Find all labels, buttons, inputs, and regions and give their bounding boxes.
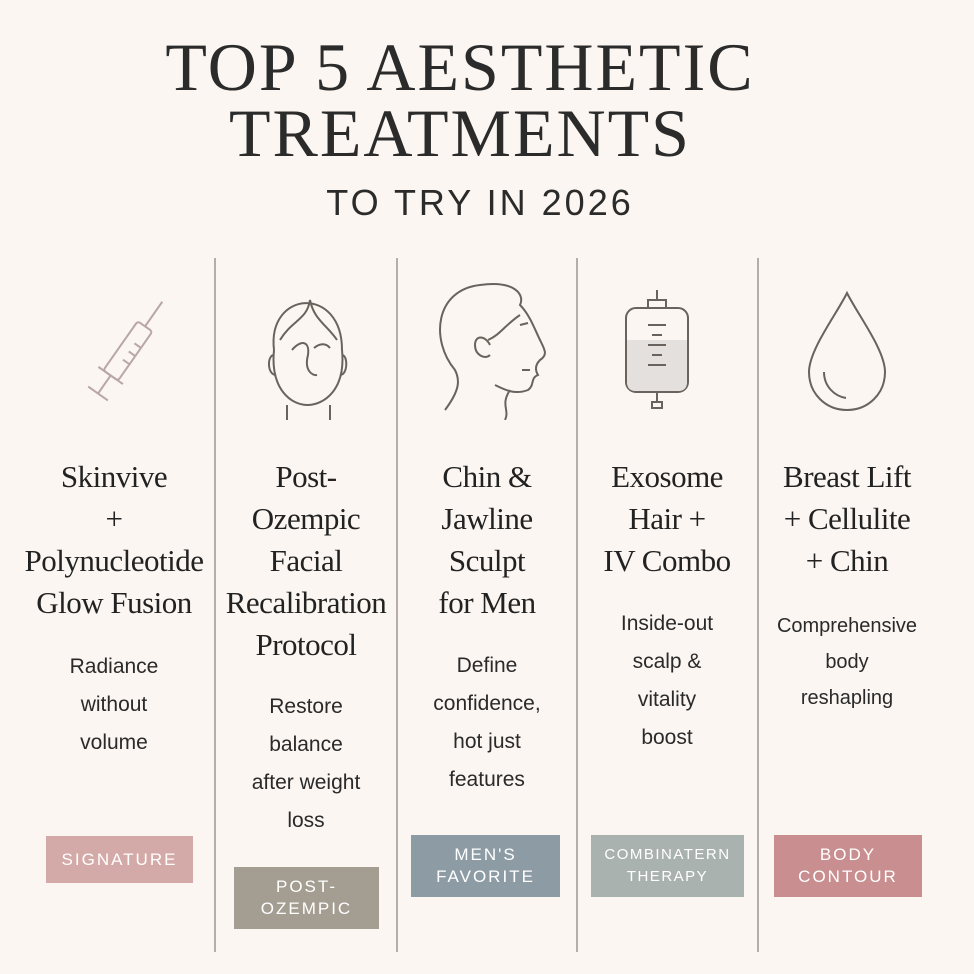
column 5: Breast Lift <box>783 459 911 494</box>
column 1: Skinvive <box>61 459 167 494</box>
column 4: Inside-out <box>621 612 713 635</box>
column 1: + <box>106 501 122 536</box>
column 2: Facial <box>270 543 342 578</box>
badge: post-ozempic: POST- <box>276 877 337 896</box>
badge: body contour <box>774 835 922 897</box>
column 2: Post- <box>275 459 337 494</box>
badge: body contour: BODY <box>820 845 876 864</box>
column 2: Protocol <box>255 627 357 662</box>
badge: combination therapy: THERAPY <box>627 868 708 885</box>
column 3: Chin & <box>442 459 532 494</box>
column 4: scalp & <box>633 650 701 673</box>
title: TOP 5 AESTHETIC <box>165 29 755 105</box>
badge: men's favorite <box>411 835 560 897</box>
column 1 <box>24 459 203 754</box>
column 5: + Chin <box>806 543 888 578</box>
badge: combination therapy: COMBINATERN <box>604 846 731 863</box>
column 1: without <box>81 693 147 716</box>
column 3: hot just <box>453 730 521 753</box>
column 2: balance <box>269 733 343 756</box>
icon: male profile <box>439 283 546 420</box>
column 2: after weight <box>252 771 360 794</box>
column 4: vitality <box>638 688 696 711</box>
icon: drop <box>808 290 886 411</box>
column 5 <box>777 459 917 709</box>
column 3: for Men <box>438 585 536 620</box>
badge: signature <box>46 836 193 883</box>
column 5: Comprehensive <box>777 615 917 637</box>
column 4: Exosome <box>611 459 723 494</box>
icon: IV bag <box>625 290 689 409</box>
column 5: + Cellulite <box>784 501 910 536</box>
title <box>165 29 755 171</box>
column 2: loss <box>287 809 325 832</box>
icon: syringe <box>88 301 163 402</box>
column 4: Hair + <box>628 501 706 536</box>
column 3: Define <box>457 654 517 677</box>
column 3: Sculpt <box>449 543 525 578</box>
column 2 <box>226 459 386 832</box>
column 4 <box>603 459 731 749</box>
column 1: Glow Fusion <box>36 585 192 620</box>
badge: signature: SIGNATURE <box>62 850 177 868</box>
column 1: Polynucleotide <box>24 543 203 578</box>
badge: body contour: CONTOUR <box>798 867 898 886</box>
column 2: Recalibration <box>226 585 386 620</box>
column 3: confidence, <box>433 692 541 715</box>
badge: combination therapy <box>591 835 744 897</box>
column 2: Restore <box>269 695 343 718</box>
column 1: volume <box>80 731 148 754</box>
column 3: Jawline <box>441 501 533 536</box>
column 3: features <box>449 768 525 791</box>
column 5: body <box>825 651 869 673</box>
column 1: Radiance <box>70 655 158 678</box>
column 4: IV Combo <box>603 543 731 578</box>
subtitle: TO TRY IN 2026 <box>326 182 634 223</box>
column 5: reshapling <box>801 687 893 709</box>
badge: post-ozempic: OZEMPIC <box>261 899 352 918</box>
badge: men's favorite: FAVORITE <box>436 867 535 886</box>
title: TREATMENTS <box>229 95 691 171</box>
badge: men's favorite: MEN'S <box>454 845 517 864</box>
column 3 <box>433 459 541 791</box>
column 2: Ozempic <box>252 501 360 536</box>
badge: post-ozempic <box>234 867 379 929</box>
column 4: boost <box>641 726 693 749</box>
icon: face <box>268 300 348 420</box>
